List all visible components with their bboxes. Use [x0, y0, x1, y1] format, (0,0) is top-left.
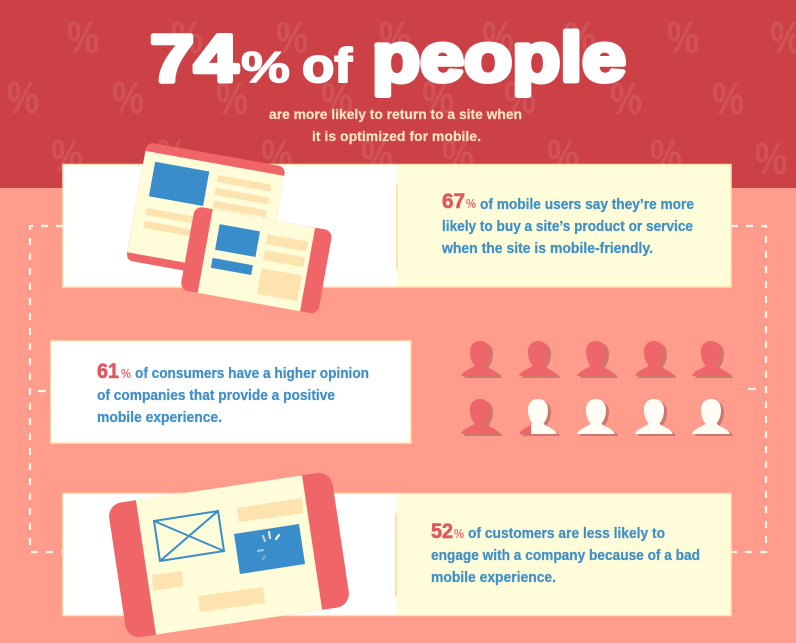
- stat text: 67%: of mobile users say they’re more: [480, 197, 694, 213]
- red header background: [0, 0, 796, 188]
- title: of: [302, 40, 353, 93]
- icon: large back tablet: [126, 142, 286, 285]
- percent sign background pattern: %: [321, 73, 353, 124]
- icon: bottom tablet with broken image and loading spinner: [107, 471, 351, 639]
- stat text: 52%: of customers are less likely to: [468, 526, 665, 542]
- partially filled person: [519, 425, 531, 434]
- stat text: 52%: mobile experience.: [431, 570, 556, 586]
- subtitle: are more likely to return to a site when: [269, 106, 522, 122]
- stat text: 61%: %: [121, 366, 131, 381]
- pictogram: 61 of 100 people: [461, 341, 733, 436]
- stat text: 52%: %: [454, 526, 464, 541]
- percent sign background pattern: %: [755, 133, 787, 184]
- percent sign background pattern: %: [442, 130, 474, 181]
- dashed connector bracket: [30, 226, 766, 552]
- stat text: 67%: %: [466, 196, 476, 211]
- title: people: [372, 19, 626, 96]
- panel: bad mobile experience stat: [63, 494, 731, 616]
- panel: positive mobile experience stat: [51, 341, 411, 443]
- shadows: [464, 343, 733, 436]
- stat text: 67%: likely to buy a site’s product or service: [442, 219, 693, 235]
- percent sign background pattern: [7, 12, 796, 184]
- percent sign background pattern: %: [67, 12, 99, 63]
- percent sign background pattern: %: [216, 73, 248, 124]
- percent sign background pattern: %: [564, 12, 596, 63]
- icon: loading spinner: [258, 532, 279, 559]
- percent sign background pattern: %: [650, 130, 682, 181]
- empty people: [519, 399, 730, 434]
- stat text: 61%: mobile experience.: [97, 410, 222, 426]
- stat text: 61%: 61: [97, 360, 119, 383]
- stat text: 67%: when the site is mobile-friendly.: [441, 241, 653, 257]
- percent sign background pattern: %: [610, 73, 642, 124]
- percent sign background pattern: %: [504, 72, 536, 123]
- icon: image placeholder: [154, 511, 224, 561]
- percent sign background pattern: %: [361, 130, 393, 181]
- stat text: 52%: [431, 520, 700, 586]
- percent sign background pattern: %: [51, 130, 83, 181]
- title: [150, 19, 626, 96]
- stat text: 52%: 52: [431, 520, 453, 543]
- percent sign background pattern: %: [667, 12, 699, 63]
- percent sign background pattern: %: [276, 12, 308, 63]
- stat text: 61%: of companies that provide a positive: [97, 388, 335, 404]
- stat text: 52%: engage with a company because of a bad: [431, 548, 700, 564]
- percent sign background pattern: %: [171, 12, 203, 63]
- panel: mobile-friendly purchase stat: [63, 164, 731, 287]
- stat text: 67%: [441, 190, 694, 257]
- percent sign background pattern: %: [712, 73, 744, 124]
- filled people: [461, 341, 730, 434]
- title: 74: [150, 22, 238, 96]
- percent sign background pattern: %: [156, 130, 188, 181]
- subtitle: [269, 106, 522, 144]
- stat text: 61%: of consumers have a higher opinion: [135, 366, 369, 382]
- subtitle: it is optimized for mobile.: [312, 128, 481, 144]
- title: %: [241, 43, 290, 92]
- percent sign background pattern: %: [379, 12, 411, 63]
- percent sign background pattern: %: [422, 72, 454, 123]
- stat text: 61%: [97, 360, 369, 426]
- percent sign background pattern: %: [112, 72, 144, 123]
- percent sign background pattern: %: [482, 12, 514, 63]
- percent sign background pattern: %: [7, 72, 39, 123]
- percent sign background pattern: %: [261, 130, 293, 181]
- icon: small front tablet: [180, 206, 333, 314]
- percent sign background pattern: %: [547, 130, 579, 181]
- stat text: 67%: 67: [442, 190, 465, 213]
